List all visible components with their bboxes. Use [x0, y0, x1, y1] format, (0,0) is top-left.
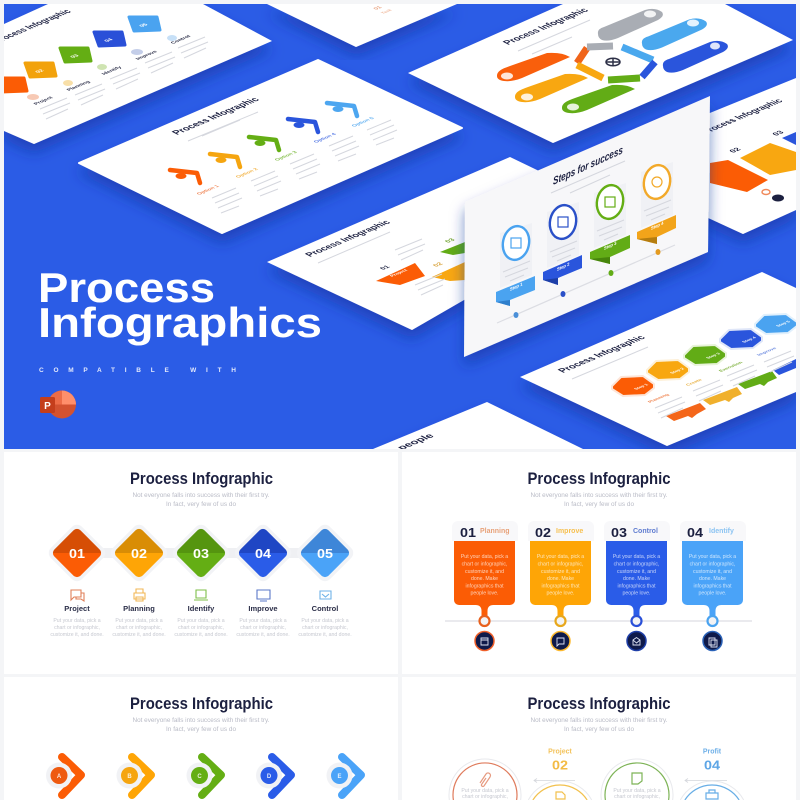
pills	[497, 9, 728, 113]
step labels: Profit	[703, 748, 722, 756]
fragment label: 01	[373, 5, 385, 11]
step labels: Identify	[101, 66, 124, 76]
header numbers: 01	[460, 526, 476, 540]
card text: infographics that	[541, 584, 580, 590]
panel: timeline cards	[402, 452, 796, 674]
option labels: Option 3	[274, 151, 299, 162]
card text: Put your data, pick a	[613, 554, 660, 560]
card text: people love.	[471, 590, 498, 596]
hexagon labels: Step 1	[633, 383, 650, 390]
letters: E	[337, 774, 342, 780]
card text: customize it, and	[465, 569, 504, 575]
step labels: Improve	[248, 604, 278, 613]
step descriptions: chart or infographic,	[302, 625, 348, 631]
chevrons	[62, 757, 361, 795]
stem and dot	[762, 190, 784, 202]
card text: customize it, and	[617, 569, 656, 575]
step descriptions: Put your data, pick a	[301, 618, 349, 624]
slide title: Process Infographic	[556, 334, 648, 374]
card text: done. Make	[699, 576, 726, 582]
cards	[454, 541, 743, 616]
card text: done. Make	[623, 576, 650, 582]
icon: PowerPoint	[40, 390, 76, 418]
compatible with: COMPATIBLE WITH	[39, 367, 236, 374]
hexagon labels: Step 5	[775, 320, 792, 327]
card text: chart or infographic,	[614, 562, 659, 568]
pill end caps	[501, 10, 720, 110]
subtitle: Not everyone falls into success with their first try.	[132, 717, 270, 724]
tile numbers: 03	[444, 238, 457, 244]
subtitle	[530, 717, 668, 733]
step numbers: 02	[727, 146, 743, 154]
slide: tile process (center)	[267, 157, 538, 342]
diamond numbers: 04	[255, 546, 272, 561]
step descriptions: Put your data, pick a	[115, 618, 163, 624]
header labels	[480, 528, 734, 535]
slide: bottom fragment	[373, 402, 583, 451]
step labels: Control	[170, 34, 193, 45]
option labels: Option 4	[313, 133, 338, 144]
circle text: chart or infographic,	[462, 794, 508, 800]
tile numbers: 02	[432, 262, 445, 268]
category labels	[647, 347, 779, 404]
slide: diamond process (top left)	[0, 4, 272, 144]
hero title: Process	[38, 264, 215, 311]
numbered tiles	[0, 17, 160, 92]
timeline	[497, 245, 675, 323]
slide: small top fragment	[267, 4, 457, 47]
hexagons	[612, 314, 797, 396]
hexagon labels: Step 2	[669, 367, 686, 374]
slide title: Process Infographic	[170, 96, 262, 136]
subtitle: Not everyone falls into success with their first try.	[132, 492, 270, 499]
fragment title: people	[395, 433, 437, 451]
header numbers	[460, 526, 703, 540]
card text: people love.	[547, 590, 574, 596]
card headers	[452, 521, 746, 541]
step circles	[500, 163, 673, 262]
option labels: Option 1	[196, 185, 221, 196]
step numbers	[730, 130, 784, 152]
circle icons	[511, 177, 662, 248]
step numbers: 03	[770, 129, 786, 137]
header labels: Control	[633, 528, 658, 535]
step descriptions	[50, 618, 352, 638]
ribbon labels: Step 2	[557, 261, 570, 272]
heading: Process Infographic	[130, 694, 273, 713]
step descriptions: chart or infographic,	[178, 625, 224, 631]
speech bubbles	[666, 359, 796, 421]
step labels	[548, 748, 722, 756]
ribbon labels: Step 4	[651, 220, 664, 231]
hero banner	[0, 4, 797, 451]
diamond numbers	[69, 546, 333, 561]
slide title: Process Infographic	[699, 98, 786, 135]
chevron icons	[170, 103, 357, 183]
header numbers: 03	[611, 526, 627, 540]
ribbon labels: Step 1	[510, 281, 523, 292]
step descriptions: chart or infographic,	[116, 625, 162, 631]
timeline rings	[480, 616, 718, 626]
ribbons	[496, 215, 676, 306]
slide title: Process Infographic	[501, 7, 592, 46]
diamond numbers: 03	[193, 546, 209, 561]
option labels: Option 5	[351, 117, 376, 128]
fragment label	[374, 6, 392, 14]
hexagon labels	[633, 320, 792, 390]
icon badges	[475, 632, 722, 650]
fragment label: Task	[380, 8, 394, 14]
segmented ring	[577, 46, 655, 80]
lettered circles	[46, 762, 352, 788]
icon: PowerPoint: P	[44, 401, 51, 412]
step numbers: 02	[552, 758, 568, 772]
heading: Process Infographic	[130, 469, 273, 488]
column backgrounds	[500, 162, 673, 288]
card text: Put your data, pick a	[461, 554, 508, 560]
category labels: Improve	[756, 347, 779, 357]
subtitle	[132, 492, 270, 508]
card text: chart or infographic,	[462, 562, 507, 568]
slide: chevron options (center left)	[79, 60, 462, 233]
panel: diamond steps	[4, 452, 398, 674]
tile numbers: 01	[379, 265, 392, 271]
step descriptions: customize it, and done.	[112, 632, 166, 638]
connector band	[70, 548, 332, 558]
card text: Put your data, pick a	[537, 554, 584, 560]
circles	[449, 759, 744, 800]
circle text: chart or infographic,	[614, 794, 660, 800]
letters: C	[197, 774, 202, 780]
circle text: Put your data, pick a	[461, 788, 509, 794]
card text: people love.	[623, 590, 650, 596]
header labels: Planning	[480, 528, 510, 535]
card text: customize it, and	[693, 569, 732, 575]
step icons	[27, 35, 177, 100]
step text lines	[503, 200, 671, 281]
subtitle: In fact, very few of us do	[166, 501, 236, 508]
hero title	[38, 264, 322, 346]
subtitle: Not everyone falls into success with their first try.	[530, 492, 668, 499]
option labels: Option 2	[235, 168, 260, 179]
numbered tiles: 03	[70, 54, 81, 59]
card text: done. Make	[547, 576, 574, 582]
subtitle	[530, 492, 668, 508]
hero title: Infographics	[38, 299, 322, 346]
step numbers	[552, 758, 721, 772]
card text: chart or infographic,	[690, 562, 735, 568]
step descriptions: customize it, and done.	[298, 632, 352, 638]
card text: people love.	[699, 590, 726, 596]
panel: circle steps	[402, 677, 796, 800]
arrows	[534, 778, 727, 782]
step labels	[64, 604, 338, 613]
step descriptions: customize it, and done.	[174, 632, 228, 638]
step numbers: 04	[704, 758, 721, 772]
option labels	[196, 117, 376, 196]
card text: done. Make	[471, 576, 498, 582]
card text: chart or infographic,	[538, 562, 583, 568]
category labels: Execution	[718, 361, 745, 373]
step descriptions: customize it, and done.	[50, 632, 104, 638]
letters: D	[267, 774, 272, 780]
panel title: Steps for success	[553, 144, 623, 188]
badge glyphs	[481, 638, 717, 647]
subtitle: In fact, very few of us do	[166, 726, 236, 733]
card text: infographics that	[465, 584, 504, 590]
tile numbers: Project	[389, 268, 410, 278]
letters: A	[57, 774, 62, 780]
step labels: Improve	[135, 50, 159, 61]
subtitle	[132, 717, 270, 733]
numbered tiles: 02	[35, 69, 46, 74]
step labels: Planning	[123, 604, 155, 613]
diamond numbers: 01	[69, 546, 85, 561]
slide: circular process (top right)	[408, 4, 793, 143]
step descriptions: Put your data, pick a	[53, 618, 101, 624]
diamond numbers: 05	[317, 546, 333, 561]
numbered tiles: 05	[139, 23, 151, 28]
subtitle: Not everyone falls into success with their first try.	[530, 717, 668, 724]
numbered tiles	[376, 242, 465, 285]
header labels: Identify	[709, 528, 734, 535]
slide: cards with stems (right)	[708, 78, 796, 246]
tile numbers	[379, 238, 457, 278]
step descriptions: chart or infographic,	[240, 625, 286, 631]
circle text: Put your data, pick a	[613, 788, 661, 794]
slide title: Process Infographic	[303, 219, 394, 258]
slide: steps for success (front panel)	[464, 96, 710, 357]
panel subtitle	[551, 161, 625, 193]
subtitle: In fact, very few of us do	[564, 726, 634, 733]
step descriptions: Put your data, pick a	[239, 618, 287, 624]
slide: hexagon process (bottom right)	[520, 272, 797, 446]
ribbon labels: Step 3	[604, 240, 617, 251]
heading: Process Infographic	[528, 469, 670, 488]
icons	[71, 589, 331, 601]
header labels: Improve	[556, 528, 583, 535]
step labels: Project	[64, 604, 90, 613]
step labels: Project	[33, 96, 55, 106]
letters	[57, 774, 342, 780]
category labels: Planning	[647, 393, 671, 404]
diamond numbers: 02	[131, 546, 147, 561]
circle text	[461, 788, 661, 800]
step labels: Identify	[188, 604, 215, 613]
step descriptions: customize it, and done.	[236, 632, 290, 638]
cards	[710, 132, 796, 192]
card text: customize it, and	[541, 569, 580, 575]
header numbers: 02	[535, 526, 551, 540]
heading: Process Infographic	[528, 694, 670, 713]
center icon	[606, 58, 620, 66]
header numbers: 04	[687, 526, 703, 540]
hexagon labels: Step 3	[705, 352, 722, 359]
letters: B	[127, 774, 132, 780]
panel: chevron steps	[4, 677, 398, 800]
timeline line	[445, 620, 752, 622]
step labels	[33, 34, 193, 106]
card text	[461, 554, 736, 596]
step labels: Control	[312, 604, 338, 613]
card text: infographics that	[617, 584, 656, 590]
step descriptions: Put your data, pick a	[177, 618, 225, 624]
step descriptions: chart or infographic,	[54, 625, 100, 631]
subtitle: In fact, very few of us do	[564, 501, 634, 508]
circle icons	[480, 773, 718, 799]
card text: infographics that	[693, 584, 732, 590]
step labels: Project	[548, 748, 573, 756]
numbered tiles: 04	[104, 38, 116, 43]
hexagon labels: Step 4	[741, 336, 758, 343]
card text: Put your data, pick a	[689, 554, 736, 560]
ribbon labels	[510, 220, 664, 292]
diamonds	[46, 522, 356, 584]
step labels: Planning	[66, 80, 92, 92]
category labels: Create	[685, 378, 704, 387]
